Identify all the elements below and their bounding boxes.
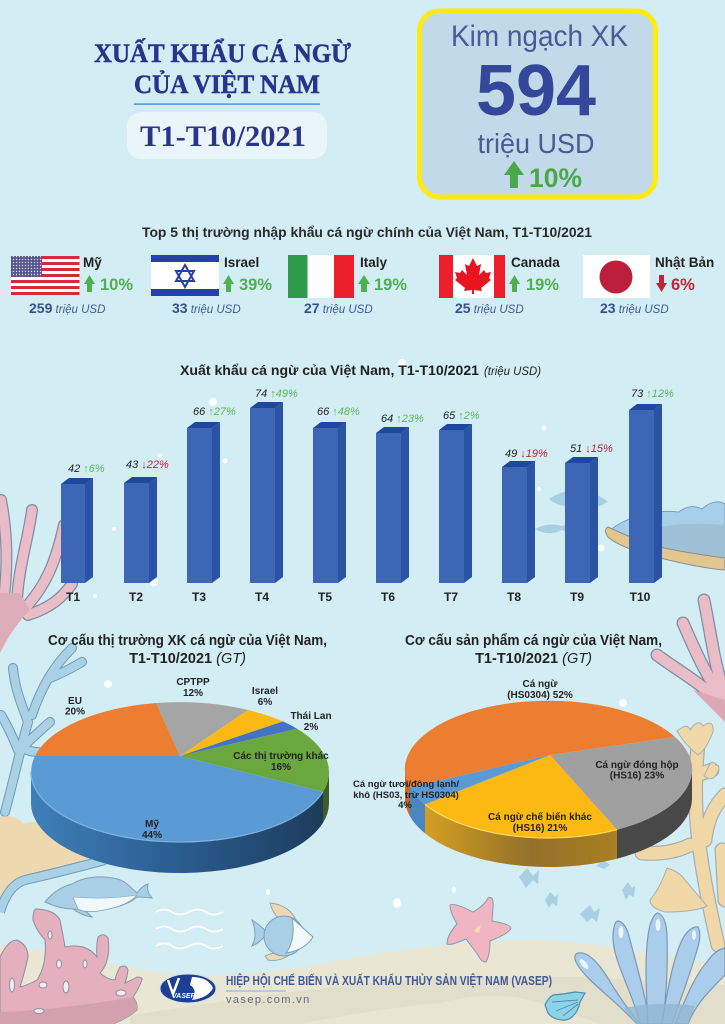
label: Israel: 6%: [258, 697, 272, 708]
label: other markets: Các thị trường khác: [233, 751, 329, 762]
label: Thailand: 2%: [304, 722, 318, 733]
bar T8: 49 ↓19%: [505, 448, 548, 460]
decoration: white waves: [156, 910, 223, 948]
label: EU: EU: [68, 696, 82, 707]
bar T3: T3: [192, 590, 206, 604]
market: USA: [11, 255, 133, 316]
footer: organisation: vasep.com.vn: [226, 994, 311, 1006]
bar T4: 74 ↑49%: [255, 388, 298, 400]
label: other markets: 16%: [271, 762, 291, 773]
bar T2: [124, 459, 169, 604]
label: other processed: Cá ngừ chế biến khác: [488, 812, 592, 823]
export value box: [420, 11, 656, 197]
bar T6: T6: [381, 590, 395, 604]
market: USA: 10%: [100, 276, 133, 294]
bar T1: T1: [66, 590, 80, 604]
market: USA: Mỹ: [83, 255, 102, 270]
footer: organisation: HIỆP HỘI CHẾ BIẾN VÀ XUẤT KHẨU THỦY SẢN VIỆT NAM (VASEP): [226, 973, 552, 988]
market: Japan: [583, 255, 714, 316]
market: Italy: 27 triệu USD: [304, 300, 373, 316]
market: Israel: Israel: [224, 255, 259, 270]
decoration: pink coral right: [657, 600, 725, 722]
bar T4: [250, 388, 298, 604]
bar T3: 66 ↑27%: [193, 406, 236, 418]
label: canned: (HS16) 23%: [610, 770, 664, 782]
bar T7: 65 ↑2%: [443, 410, 480, 422]
bar T6: [376, 413, 424, 604]
heading: market pie: [48, 633, 327, 667]
decoration: shell right: [606, 502, 725, 570]
footer: logo VASEP: VASEP: [172, 993, 196, 1000]
period pill: T1-T10/2021: [140, 120, 306, 153]
bar T5: 66 ↑48%: [317, 406, 360, 418]
heading: bar chart: (triệu USD): [484, 366, 541, 378]
label: CPTPP: CPTPP: [176, 677, 210, 688]
title: [94, 39, 351, 105]
market: Israel: [151, 255, 272, 316]
bar T10: T10: [630, 590, 651, 604]
bar T5: [313, 406, 360, 604]
bar T5: T5: [318, 590, 332, 604]
decoration: small fish behind bars: [535, 490, 608, 533]
decoration: pink coral top left: [0, 500, 72, 653]
export value box: 594: [476, 51, 596, 131]
title: XUẤT KHẨU CÁ NGỪ: [94, 39, 351, 68]
market: Italy: 19%: [374, 276, 407, 294]
decoration: small fish silhouettes: [519, 860, 635, 922]
decoration: bubbles: [93, 359, 627, 908]
footer: logo VASEP: [160, 974, 216, 1003]
title: CỦA VIỆT NAM: [134, 70, 320, 99]
bar T2: T2: [129, 590, 143, 604]
market: Italy: Italy: [360, 255, 388, 270]
footer: organisation: [226, 973, 552, 1006]
bar T4: T4: [255, 590, 269, 604]
heading: product pie: Cơ cấu sản phẩm cá ngừ của Việt Nam,: [405, 633, 662, 649]
heading: product pie: [405, 633, 662, 667]
bar T1: 42 ↑6%: [68, 463, 105, 475]
bar T1: [61, 463, 105, 604]
bar T9: 51 ↓15%: [570, 443, 613, 455]
label: fresh frozen: khô (HS03, trừ HS0304): [353, 790, 459, 801]
bar T7: [439, 410, 480, 604]
bar T9: [565, 443, 613, 604]
label: HS0304: Cá ngừ: [522, 679, 558, 690]
bar T2: 43 ↓22%: [126, 459, 169, 471]
bar chart: [61, 388, 674, 604]
export value box: Kim ngạch XK: [451, 20, 628, 53]
decoration: swimming fish: [45, 877, 152, 917]
bar T6: 64 ↑23%: [381, 413, 424, 425]
pie chart: markets: [31, 677, 332, 873]
bar T8: [502, 448, 548, 604]
label: USA: Mỹ: [145, 819, 159, 830]
bar T7: T7: [444, 590, 458, 604]
label: canned: Cá ngừ đóng hộp: [595, 760, 679, 771]
market: Japan: Nhật Bản: [655, 255, 714, 270]
period pill: [127, 112, 327, 159]
label: other processed: (HS16) 21%: [513, 823, 567, 834]
market: Israel: 39%: [239, 276, 272, 294]
bar T9: T9: [570, 590, 584, 604]
heading: market pie: Cơ cấu thị trường XK cá ngừ của Việt Nam,: [48, 633, 327, 649]
export value box: triệu USD: [478, 128, 594, 159]
label: HS0304: (HS0304) 52%: [507, 690, 573, 701]
label: CPTPP: 12%: [183, 688, 203, 699]
label: USA: 44%: [142, 830, 162, 841]
market: Japan: 6%: [671, 276, 695, 294]
export value box: 10%: [529, 163, 582, 193]
decoration: blue coral left: [1, 648, 82, 812]
market: Canada: [439, 255, 560, 316]
market: Israel: 33 triệu USD: [172, 300, 241, 316]
label: Thailand: Thái Lan: [290, 711, 332, 722]
decoration: pink coral bottom left: [0, 909, 142, 1024]
bar T10: 73 ↑12%: [631, 388, 674, 400]
decoration: tan coral right: [642, 723, 725, 945]
bar T3: [187, 406, 236, 604]
market: USA: 259 triệu USD: [29, 300, 105, 316]
label: Israel: Israel: [252, 686, 278, 697]
decoration: starfish: [447, 897, 511, 962]
decoration: scallop shell: [545, 992, 585, 1020]
heading: top 5 markets: Top 5 thị trường nhập khẩu cá ngừ chính của Việt Nam, T1-T10/2021: [142, 224, 592, 240]
decoration: blue plant bottom right: [575, 913, 725, 1024]
label: EU: 20%: [65, 706, 85, 718]
heading: bar chart: Xuất khẩu cá ngừ của Việt Nam, T1-T10/2021: [180, 363, 480, 378]
market: Italy: [288, 255, 407, 316]
pie chart: products: [353, 679, 692, 867]
market: Japan: 23 triệu USD: [600, 300, 669, 316]
market: Canada: 25 triệu USD: [455, 300, 524, 316]
bar T10: [629, 388, 674, 604]
decoration: angel fish: [252, 903, 313, 960]
bar T8: T8: [507, 590, 521, 604]
label: fresh frozen: 4%: [398, 800, 412, 811]
label: fresh frozen: Cá ngừ tươi/đông lạnh/: [353, 779, 459, 790]
heading: market pie: T1-T10/2021 (GT): [129, 651, 246, 667]
icon: up arrow: [504, 161, 524, 188]
decoration: tan rock left: [0, 816, 150, 912]
market: Canada: 19%: [526, 276, 559, 294]
heading: product pie: T1-T10/2021 (GT): [475, 651, 592, 667]
market: Canada: Canada: [511, 255, 560, 270]
